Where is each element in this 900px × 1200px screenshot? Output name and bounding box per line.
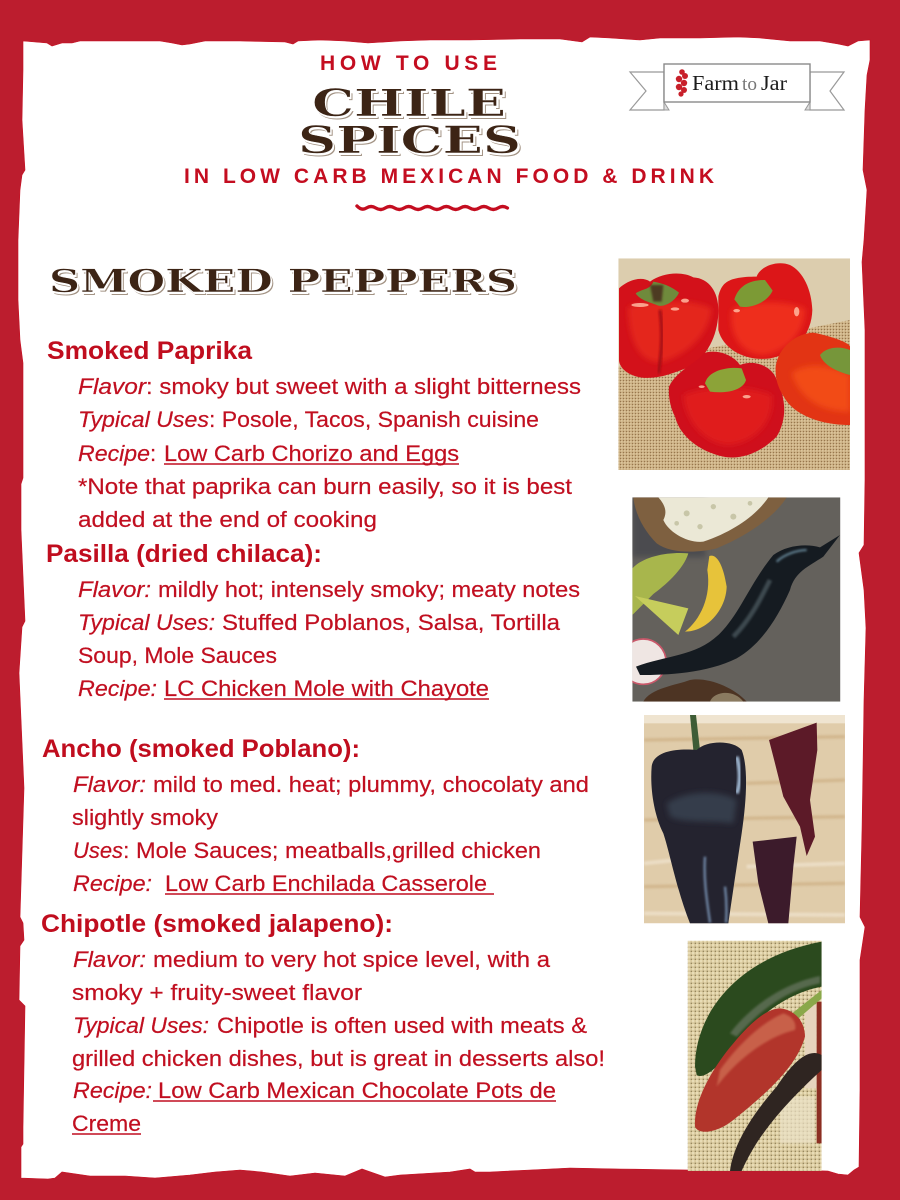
- title: chile spices: SPICES: [298, 118, 521, 162]
- text block: ancho: [42, 735, 589, 896]
- header: how to use: HOW TO USE: [320, 52, 497, 75]
- text block: smoked paprika: Flavor: [78, 374, 148, 399]
- text block: pasilla: Stuffed Poblanos, Salsa, Tortilla: [222, 610, 561, 635]
- text block: pasilla: LC Chicken Mole with Chayote: [164, 676, 489, 701]
- text block: smoked paprika: Smoked Paprika: [47, 337, 253, 365]
- text block: smoked paprika: : Posole, Tacos, Spanish cuisine: [209, 407, 539, 432]
- text block: pasilla: Recipe:: [78, 676, 157, 701]
- text block: smoked paprika: Typical Uses: [78, 407, 209, 432]
- text block: pasilla: mildly hot; intensely smoky; meaty notes: [158, 577, 580, 602]
- text block: pasilla: Typical Uses:: [78, 610, 215, 635]
- text block: ancho: Low Carb Enchilada Casserole: [165, 871, 487, 896]
- wavy divider: [357, 206, 507, 210]
- text block: chipotle: Flavor:: [73, 947, 146, 972]
- title: chile spices: CHILE: [312, 81, 506, 125]
- text block: smoked paprika: [47, 337, 581, 532]
- text block: smoked paprika: *Note that paprika can burn easily, so it is best: [78, 474, 572, 499]
- title: chile spices: CHILE: [314, 84, 509, 128]
- photo: chipotle and jalapeno peppers: [688, 941, 822, 1171]
- photo: pasilla pepper on slate: [621, 497, 840, 702]
- logo: farm to jar banner: [630, 64, 844, 110]
- text block: pasilla: Pasilla (dried chilaca):: [46, 540, 322, 568]
- text block: ancho: Recipe:: [73, 871, 152, 896]
- logo: farm to jar banner: to: [742, 74, 757, 95]
- title: chile spices: SPICES: [300, 121, 524, 165]
- text block: chipotle: Low Carb Mexican Chocolate Pots de: [158, 1078, 556, 1103]
- title: chile spices: SPICES: [299, 120, 523, 164]
- logo: farm to jar banner: Farm: [692, 71, 739, 95]
- text block: chipotle: Typical Uses:: [73, 1013, 209, 1038]
- section heading: smoked peppers: [49, 262, 520, 303]
- text block: smoked paprika: Recipe: [78, 441, 150, 466]
- text block: chipotle: Chipotle is often used with meats &: [217, 1013, 587, 1038]
- text block: ancho: Flavor:: [73, 772, 146, 797]
- text block: pasilla: Soup, Mole Sauces: [78, 643, 277, 668]
- text block: ancho: : Mole Sauces; meatballs,grilled chicken: [123, 838, 541, 863]
- text block: chipotle: [41, 910, 605, 1136]
- title: chile spices: [298, 81, 524, 165]
- photo: ancho poblano and dried peppers: [644, 715, 845, 923]
- text block: chipotle: Creme: [72, 1111, 141, 1136]
- text block: chipotle: Chipotle (smoked jalapeno):: [41, 910, 393, 938]
- logo: farm to jar banner: Jar: [761, 71, 787, 95]
- text block: ancho: Uses: [73, 838, 123, 863]
- text block: chipotle: Recipe:: [73, 1078, 152, 1103]
- title: chile spices: CHILE: [313, 83, 508, 127]
- text block: pasilla: [46, 540, 580, 701]
- text block: smoked paprika: added at the end of cooking: [78, 507, 377, 532]
- text block: chipotle: medium to very hot spice level, with a: [153, 947, 551, 972]
- section heading: smoked peppers: SMOKED PEPPERS: [49, 262, 517, 300]
- text block: chipotle: grilled chicken dishes, but is great in desserts also!: [72, 1046, 605, 1071]
- text block: smoked paprika: Low Carb Chorizo and Eggs: [164, 441, 459, 466]
- section heading: smoked peppers: SMOKED PEPPERS: [51, 265, 520, 303]
- text block: chipotle: smoky + fruity-sweet flavor: [72, 980, 362, 1005]
- subtitle: IN LOW CARB MEXICAN FOOD & DRINK: [184, 165, 714, 188]
- text block: ancho: Ancho (smoked Poblano):: [42, 735, 360, 763]
- text block: ancho: mild to med. heat; plummy, chocolaty and: [153, 772, 589, 797]
- section heading: smoked peppers: SMOKED PEPPERS: [50, 264, 519, 302]
- text block: pasilla: Flavor:: [78, 577, 151, 602]
- text block: ancho: slightly smoky: [72, 805, 218, 830]
- photo: red paprika peppers: [618, 258, 850, 470]
- text block: smoked paprika: :: [150, 441, 156, 466]
- text block: smoked paprika: : smoky but sweet with a slight bitterness: [146, 374, 581, 399]
